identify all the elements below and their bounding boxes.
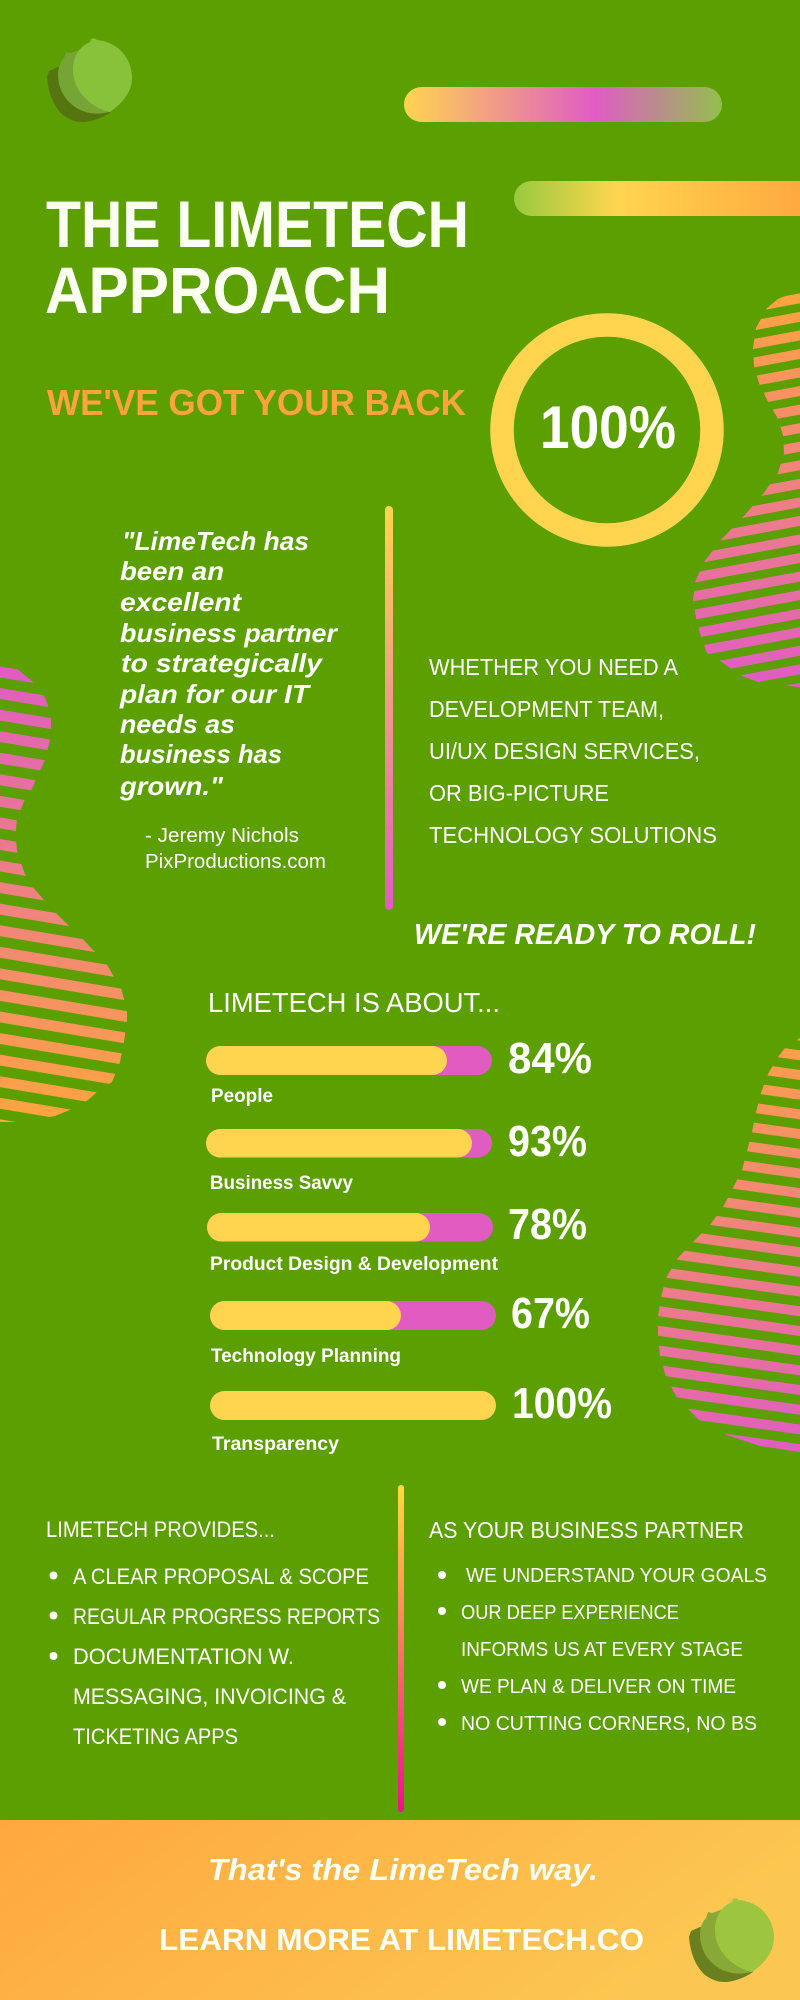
bar: Transparency 100%: Transparency bbox=[212, 1434, 339, 1455]
testimonial attribution bbox=[145, 825, 326, 873]
bar: Business Savvy 93% bbox=[206, 1117, 587, 1194]
bar chart heading: LIMETECH IS ABOUT... bbox=[208, 987, 500, 1018]
list items: INFORMS US AT EVERY STAGE bbox=[461, 1638, 743, 1661]
bar: Business Savvy 93%: 93% bbox=[508, 1117, 587, 1166]
bar: Transparency 100% bbox=[210, 1379, 612, 1455]
bar: Technology Planning 67%: Technology Planning bbox=[211, 1346, 401, 1367]
icon: lime logo footer bbox=[689, 1898, 774, 1982]
bar: Product Design and Development 78% bbox=[207, 1200, 587, 1275]
services text block: WHETHER YOU NEED A bbox=[429, 654, 679, 680]
decorative striped blob: left bbox=[0, 666, 127, 1122]
title bbox=[45, 187, 469, 327]
decorative striped blob: lower right bbox=[658, 1038, 800, 1452]
services text block bbox=[429, 654, 717, 848]
gradient pill: right bbox=[514, 181, 800, 216]
panel: LimeTech provides list bbox=[46, 1517, 380, 1749]
list items: MESSAGING, INVOICING & bbox=[73, 1684, 346, 1709]
ring stat: 100% bbox=[502, 325, 712, 535]
bar: Product Design and Development 78%: Product Design & Development bbox=[210, 1254, 499, 1275]
footer band bbox=[0, 1820, 800, 2000]
services text block: DEVELOPMENT TEAM, bbox=[429, 696, 664, 722]
title: APPROACH bbox=[45, 253, 390, 327]
list items bbox=[438, 1564, 767, 1735]
list items: NO CUTTING CORNERS, NO BS bbox=[461, 1712, 757, 1735]
ring stat: 100%: 100% bbox=[540, 394, 676, 461]
bar: People 84%: 84% bbox=[508, 1034, 592, 1083]
list items: WE UNDERSTAND YOUR GOALS bbox=[466, 1564, 767, 1587]
services text block: TECHNOLOGY SOLUTIONS bbox=[429, 822, 717, 848]
bar: People 84%: People bbox=[211, 1086, 273, 1107]
testimonial quote: to strategically bbox=[121, 648, 324, 678]
bar: Technology Planning 67%: 67% bbox=[511, 1289, 590, 1338]
vertical divider: upper bbox=[385, 506, 393, 910]
bar: People 84% bbox=[206, 1034, 592, 1107]
list items: A CLEAR PROPOSAL & SCOPE bbox=[73, 1564, 369, 1589]
testimonial quote: business partner bbox=[120, 618, 339, 648]
callout: WE'RE READY TO ROLL! bbox=[414, 919, 756, 951]
list items: WE PLAN & DELIVER ON TIME bbox=[461, 1675, 736, 1698]
footer tagline: That's the LimeTech way. bbox=[208, 1852, 598, 1887]
bar chart bbox=[206, 1034, 612, 1455]
testimonial attribution: PixProductions.com bbox=[145, 851, 326, 873]
bar: Transparency 100%: 100% bbox=[512, 1379, 612, 1428]
subtitle: WE'VE GOT YOUR BACK bbox=[47, 382, 466, 423]
testimonial quote: excellent bbox=[120, 587, 242, 617]
heading: as your business partner: AS YOUR BUSINESS PARTNER bbox=[429, 1517, 744, 1543]
list items bbox=[50, 1564, 380, 1749]
testimonial quote: "LimeTech has bbox=[122, 526, 309, 556]
vertical divider: lower bbox=[398, 1485, 404, 1812]
testimonial quote bbox=[119, 526, 339, 801]
title: THE LIMETECH bbox=[46, 187, 469, 261]
list items: OUR DEEP EXPERIENCE bbox=[461, 1601, 679, 1624]
decorative striped blob: upper right bbox=[693, 293, 800, 687]
list items: TICKETING APPS bbox=[73, 1724, 238, 1749]
footer call to action: LEARN MORE AT LIMETECH.CO bbox=[159, 1922, 644, 1957]
bar: Product Design and Development 78%: 78% bbox=[508, 1200, 587, 1249]
services text block: OR BIG-PICTURE bbox=[429, 780, 609, 806]
bar: Business Savvy 93%: Business Savvy bbox=[210, 1173, 353, 1194]
testimonial quote: needs as bbox=[120, 709, 235, 739]
testimonial quote: business has bbox=[120, 739, 282, 769]
heading: LimeTech provides: LIMETECH PROVIDES... bbox=[46, 1517, 275, 1542]
testimonial quote: been an bbox=[120, 556, 224, 586]
testimonial quote: grown." bbox=[119, 771, 224, 801]
list items: REGULAR PROGRESS REPORTS bbox=[73, 1604, 380, 1629]
testimonial quote: plan for our IT bbox=[119, 679, 311, 709]
icon: lime logo top bbox=[47, 38, 132, 122]
bar: Technology Planning 67% bbox=[210, 1289, 590, 1367]
testimonial attribution: - Jeremy Nichols bbox=[145, 825, 299, 847]
services text block: UI/UX DESIGN SERVICES, bbox=[429, 738, 700, 764]
list items: DOCUMENTATION W. bbox=[73, 1644, 294, 1669]
panel: as your business partner list bbox=[429, 1517, 767, 1735]
gradient pill: top bbox=[404, 87, 722, 122]
